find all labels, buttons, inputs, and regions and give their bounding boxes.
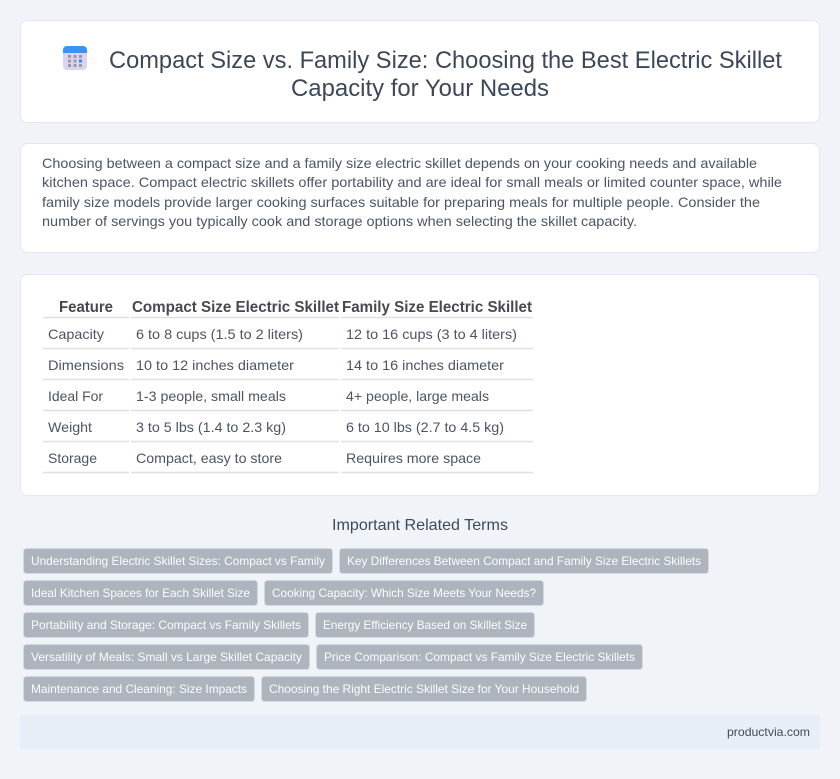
tag [24,580,258,606]
tag [340,548,708,574]
title: Compact Size vs. Family Size: Choosing the Best Electric Skillet [109,47,782,74]
table header: Compact Size Electric Skillet [132,299,340,316]
tag [264,580,544,606]
row: dimensions: Dimensions [48,357,124,373]
intro text block: number of servings you typically cook and storage options when selecting the skillet capacity. [42,213,637,229]
row: capacity: 12 to 16 cups (3 to 4 liters) [346,326,517,342]
row: storage: Storage [48,450,97,466]
row: weight: 3 to 5 lbs (1.4 to 2.3 kg) [136,419,286,435]
title: Capacity for Your Needs [291,75,549,102]
tag: Ideal Kitchen Spaces for Each Skillet Size [31,586,250,600]
related term tags [24,548,708,702]
row: ideal for: Ideal For [48,388,103,404]
intro text block [42,155,782,229]
table header [59,299,533,316]
tag [24,676,254,702]
row: capacity [48,326,517,342]
tag: Versatility of Meals: Small vs Large Skillet Capacity [31,650,302,664]
tag: Portability and Storage: Compact vs Family Skillets [31,618,301,632]
tag: Cooking Capacity: Which Size Meets Your Needs? [272,586,536,600]
row: dimensions: 14 to 16 inches diameter [346,357,504,373]
tag: Choosing the Right Electric Skillet Size for Your Household [269,682,579,696]
panel: comparison table [20,274,820,496]
tag [24,644,310,670]
tag [262,676,586,702]
heading: important related terms: Important Related Terms [332,517,508,534]
footer bar: productvia.com [727,725,810,739]
intro text block: kitchen space. Compact electric skillets offer portability and are ideal for small meals or limited counter space, while [42,174,782,190]
tag [316,644,642,670]
row: storage: Compact, easy to store [136,450,282,466]
row: weight: 6 to 10 lbs (2.7 to 4.5 kg) [346,419,504,435]
panel: introduction [20,144,820,252]
row: ideal for: 4+ people, large meals [346,388,489,404]
tag [316,612,534,638]
row: ideal for [48,388,489,404]
tag: Key Differences Between Compact and Family Size Electric Skillets [347,554,701,568]
tag: Understanding Electric Skillet Sizes: Compact vs Family [31,554,325,568]
icon: calendar [63,46,87,70]
row: capacity: Capacity [48,326,104,342]
panel: header [20,20,820,122]
tag: Maintenance and Cleaning: Size Impacts [31,682,247,696]
row: weight: Weight [48,419,92,435]
title [109,47,782,102]
footer bar [20,715,820,749]
intro text block: family size models provide larger cooking surfaces suitable for preparing meals for multiple people. Consider the [42,194,760,210]
row: ideal for: 1-3 people, small meals [136,388,286,404]
table header: Feature [59,299,113,316]
table header: Family Size Electric Skillet [342,299,533,316]
row: capacity: 6 to 8 cups (1.5 to 2 liters) [136,326,303,342]
row: storage [48,450,481,466]
row: weight [48,419,504,435]
intro text block: Choosing between a compact size and a family size electric skillet depends on your cooking needs and available [42,155,757,171]
tag [24,612,308,638]
tag: Price Comparison: Compact vs Family Size Electric Skillets [324,650,635,664]
tag: Energy Efficiency Based on Skillet Size [323,618,527,632]
row: dimensions: 10 to 12 inches diameter [136,357,294,373]
row: dimensions [48,357,504,373]
row: storage: Requires more space [346,450,481,466]
tag [24,548,332,574]
